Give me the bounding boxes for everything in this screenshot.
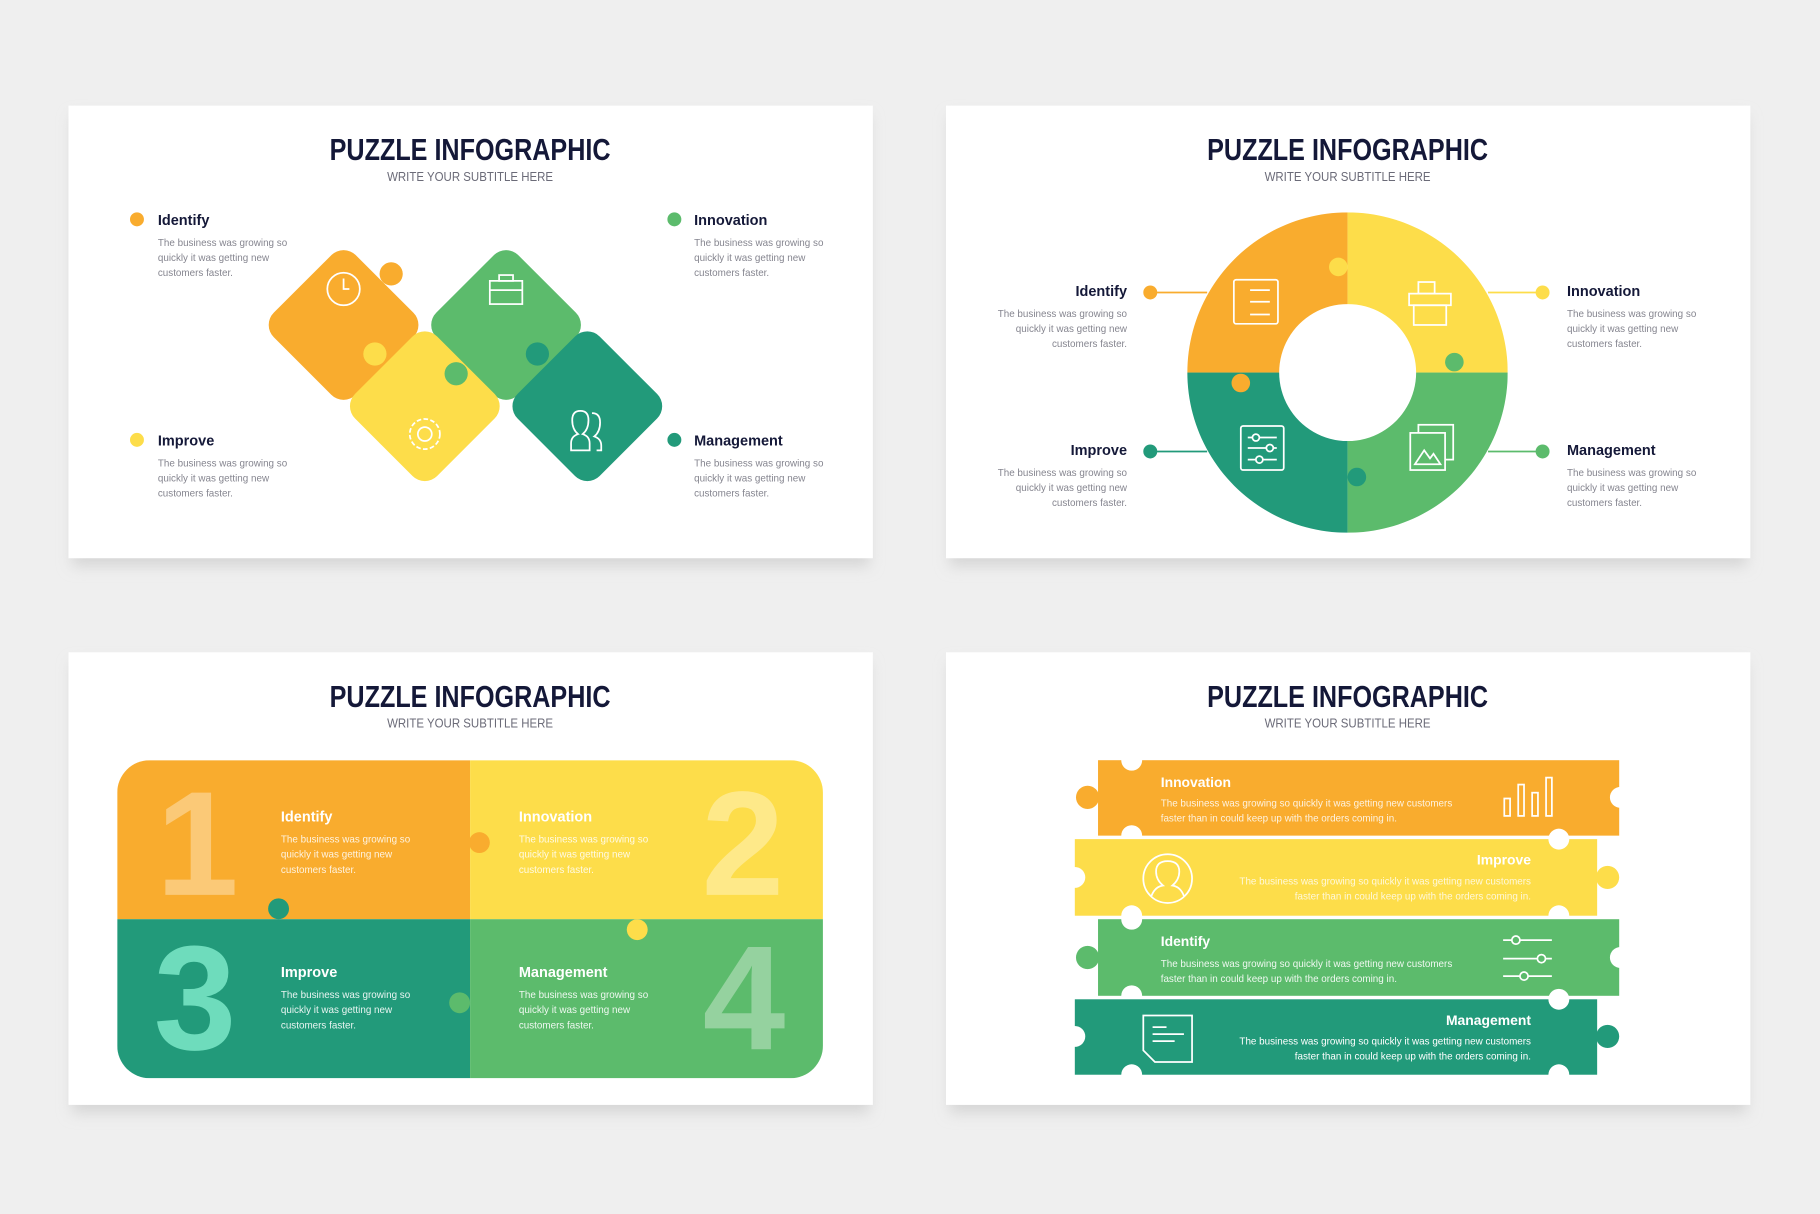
text: management: customers faster. (1567, 498, 1642, 509)
text: innovation (667, 212, 824, 279)
text: management (1567, 443, 1697, 509)
title: PUZZLE INFOGRAPHIC (330, 681, 611, 714)
title: PUZZLE INFOGRAPHIC (330, 134, 611, 167)
text: improve (130, 433, 288, 500)
text: improve: Improve (158, 434, 214, 450)
text: improve: quickly it was getting new (158, 474, 270, 485)
strip: identify: faster than in could keep up with the orders coming in. (1161, 974, 1397, 985)
text: improve (998, 443, 1128, 509)
strip: innovation: The business was growing so quickly it was getting new customers (1161, 799, 1452, 810)
panel: ring puzzle (946, 106, 1750, 566)
connector: identify (1143, 286, 1207, 299)
text: innovation: customers faster. (519, 865, 594, 876)
text: management: Management (1567, 443, 1656, 459)
icon: sliders (1241, 426, 1284, 470)
text: identify: The business was growing so (281, 835, 411, 846)
text: improve: Improve (281, 965, 337, 981)
subtitle: WRITE YOUR SUBTITLE HERE (387, 716, 553, 731)
ring chart (1184, 209, 1511, 536)
strip: management: The business was growing so quickly it was getting new customers (1239, 1037, 1531, 1048)
text: management (667, 433, 824, 500)
text: innovation: The business was growing so (694, 238, 824, 249)
text: innovation: customers faster. (1567, 339, 1642, 350)
text: improve: quickly it was getting new (1016, 483, 1128, 494)
text: improve: The business was growing so (158, 459, 288, 470)
text: management: quickly it was getting new (694, 474, 806, 485)
text: innovation: quickly it was getting new (519, 850, 631, 861)
subtitle: WRITE YOUR SUBTITLE HERE (1265, 716, 1431, 731)
text: identify (281, 810, 411, 876)
panel: numbered grid (68, 652, 873, 1113)
text: identify: Identify (1075, 284, 1127, 300)
subtitle: WRITE YOUR SUBTITLE HERE (387, 169, 553, 184)
numbers: 3 (154, 916, 236, 1081)
text: innovation: The business was growing so (1567, 309, 1697, 320)
title: PUZZLE INFOGRAPHIC (1207, 134, 1488, 167)
text: identify: Identify (158, 213, 209, 229)
numbers: 1 (156, 762, 239, 927)
numbers: 4 (703, 916, 785, 1081)
text: identify: customers faster. (158, 268, 233, 279)
text: management: quickly it was getting new (519, 1005, 631, 1016)
strip: improve: faster than in could keep up with the orders coming in. (1295, 891, 1531, 902)
text: improve: The business was growing so (281, 990, 411, 1001)
text: innovation: customers faster. (694, 268, 769, 279)
connector: improve (1143, 445, 1207, 458)
text: identify: The business was growing so (158, 238, 288, 249)
connector: management (1488, 445, 1550, 458)
strip: identify (1076, 909, 1631, 1006)
strip: improve (1064, 829, 1619, 926)
grid blocks (117, 760, 823, 1078)
puzzle piece: dark green (505, 324, 669, 488)
text: improve: Improve (1071, 443, 1127, 459)
text: identify (998, 284, 1128, 350)
strip: identify: The business was growing so quickly it was getting new customers (1161, 959, 1452, 970)
connector: innovation (1488, 286, 1550, 299)
numbers: 2 (702, 762, 784, 927)
text: management: The business was growing so (1567, 468, 1697, 479)
puzzle piece: orange (261, 243, 426, 407)
numbers (154, 762, 785, 1081)
text: improve: The business was growing so (998, 468, 1128, 479)
text: innovation: Innovation (519, 810, 592, 826)
strip: innovation: faster than in could keep up with the orders coming in. (1161, 814, 1397, 825)
text: management: Management (694, 434, 783, 450)
text: identify: quickly it was getting new (1016, 324, 1128, 335)
text: innovation: Innovation (694, 213, 767, 229)
text: improve: customers faster. (1052, 498, 1127, 509)
text: identify: quickly it was getting new (158, 253, 270, 264)
text: innovation (1567, 284, 1697, 350)
text: improve: customers faster. (281, 1020, 356, 1031)
text: improve: quickly it was getting new (281, 1005, 393, 1016)
text: management (519, 965, 649, 1031)
text: identify: customers faster. (281, 865, 356, 876)
panel: diamond puzzle (68, 106, 873, 566)
text: identify: The business was growing so (998, 309, 1128, 320)
text: innovation: Innovation (1567, 284, 1640, 300)
text: management: The business was growing so (694, 459, 824, 470)
strip: innovation (1076, 750, 1631, 846)
panel: strips (946, 652, 1750, 1113)
strip: innovation: Innovation (1161, 774, 1231, 790)
strip: management: Management (1446, 1012, 1531, 1028)
text: innovation: The business was growing so (519, 835, 649, 846)
strip: identify: Identify (1161, 933, 1210, 949)
text: identify: customers faster. (1052, 339, 1127, 350)
text: management: customers faster. (694, 489, 769, 500)
text: innovation (519, 810, 649, 876)
text: improve: customers faster. (158, 489, 233, 500)
text: improve (281, 965, 411, 1031)
title: PUZZLE INFOGRAPHIC (1207, 681, 1488, 714)
strip: improve: Improve (1477, 852, 1531, 868)
puzzle piece: yellow (343, 324, 507, 488)
icon: list (1234, 280, 1278, 324)
text: identify: Identify (281, 810, 332, 826)
text: innovation: quickly it was getting new (1567, 324, 1679, 335)
strip: management: faster than in could keep up with the orders coming in. (1295, 1052, 1531, 1063)
text: management: The business was growing so (519, 990, 649, 1001)
puzzle piece: green (424, 243, 588, 407)
strip: management (1064, 989, 1619, 1085)
text: management: quickly it was getting new (1567, 483, 1679, 494)
icon: images (1410, 425, 1453, 470)
icon: box (1409, 282, 1451, 325)
text: identify (130, 212, 288, 279)
text: identify: quickly it was getting new (281, 850, 393, 861)
text: management: Management (519, 965, 608, 981)
subtitle: WRITE YOUR SUBTITLE HERE (1265, 169, 1431, 184)
text: management: customers faster. (519, 1020, 594, 1031)
text: innovation: quickly it was getting new (694, 253, 806, 264)
strip: improve: The business was growing so quickly it was getting new customers (1239, 876, 1531, 887)
